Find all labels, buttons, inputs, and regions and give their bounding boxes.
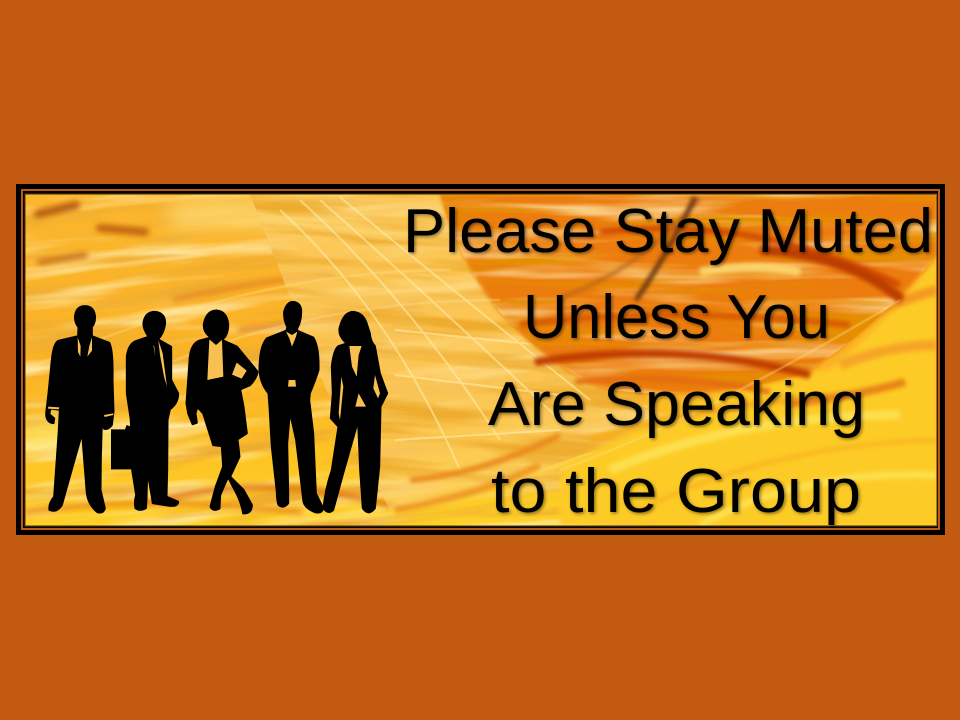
orange swirl bbox=[430, 190, 950, 400]
left streak texture bbox=[25, 194, 649, 526]
person 2 with briefcase bbox=[111, 312, 178, 510]
line 2: Unless You bbox=[523, 283, 830, 352]
line 3: Are Speaking bbox=[488, 370, 865, 439]
lower right yellow swirl bbox=[560, 255, 937, 526]
line 4: to the Group bbox=[491, 457, 861, 526]
inner frame line bbox=[25, 194, 937, 526]
person 1 bbox=[46, 306, 114, 513]
line 1: Please Stay Muted bbox=[403, 197, 933, 266]
banner frame bbox=[16, 184, 945, 535]
silhouettes of five business people bbox=[46, 302, 387, 513]
person 3 in skirt bbox=[187, 311, 257, 513]
thin light strands bbox=[25, 270, 900, 470]
person 4 with hands in pockets bbox=[259, 302, 323, 513]
pale woven panel bbox=[250, 194, 670, 510]
message text bbox=[403, 197, 933, 526]
person 5 in trouser suit bbox=[323, 312, 387, 512]
abstract flame background bbox=[25, 194, 937, 526]
